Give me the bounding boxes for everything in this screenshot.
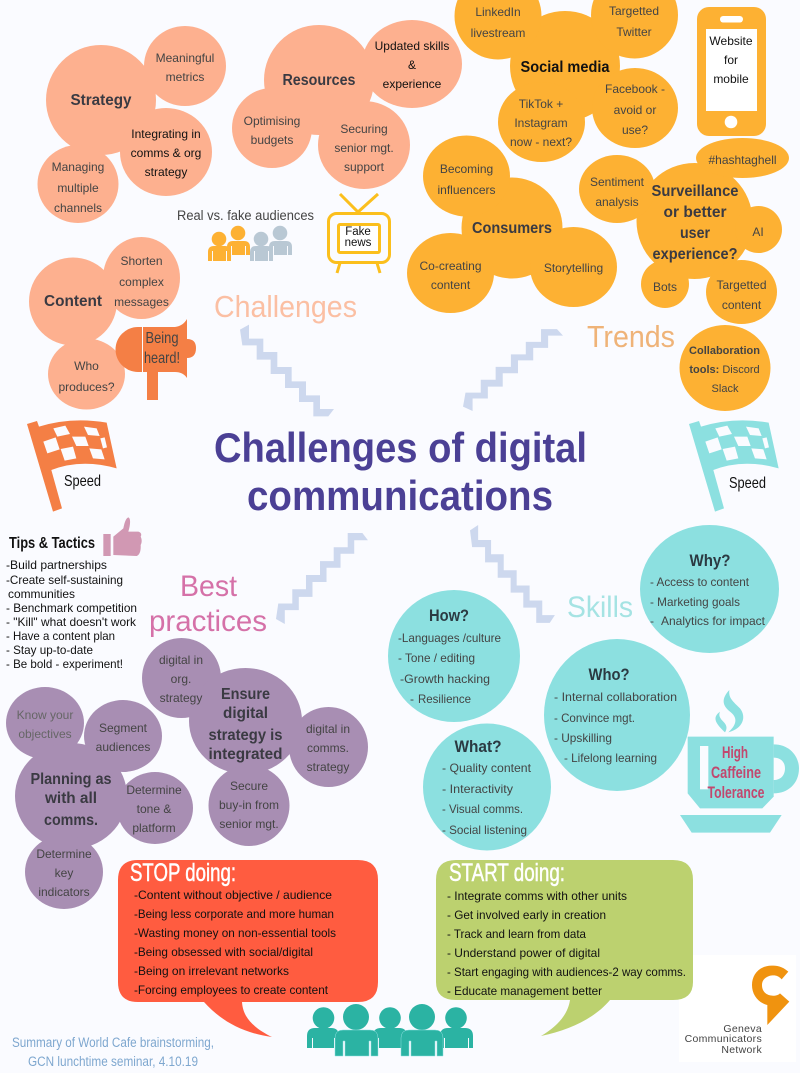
panel: strategy cluster: Strategy bbox=[70, 92, 132, 109]
panel: how: - Tone / editing bbox=[398, 651, 475, 665]
callout: real vs fake audiences: Real vs. fake audiences bbox=[177, 208, 314, 223]
panel: social media cluster bbox=[454, 0, 678, 162]
panel: surveillance cluster: Targetted bbox=[716, 278, 767, 292]
icon: coffee cup high caffeine tolerance: Caffeine bbox=[711, 764, 761, 782]
text block: tips list: - Benchmark competition bbox=[6, 601, 137, 615]
heading: best practices: practices bbox=[149, 605, 267, 638]
icon: thumbs up bbox=[103, 517, 142, 556]
panel: ensure digital strategy cluster: comms. bbox=[307, 741, 349, 755]
icon: orange speed flag: Speed bbox=[64, 473, 101, 490]
panel: planning cluster: indicators bbox=[38, 885, 90, 899]
panel: resources cluster: & bbox=[408, 58, 416, 72]
heading: tips and tactics: Tips & Tactics bbox=[9, 535, 95, 552]
icon: mobile phone website: mobile bbox=[713, 72, 749, 86]
panel: surveillance cluster: #hashtaghell bbox=[708, 153, 777, 167]
panel: ensure digital strategy cluster: org. bbox=[171, 672, 191, 686]
panel: planning cluster: comms. bbox=[44, 812, 98, 829]
panel: stop doing: -Forcing employees to create content bbox=[134, 983, 329, 997]
panel: social media cluster: now - next? bbox=[510, 135, 572, 149]
panel: resources cluster: experience bbox=[383, 77, 442, 91]
heading: best practices bbox=[149, 570, 267, 638]
panel: start doing: - Track and learn from data bbox=[447, 927, 586, 941]
panel: why: - Marketing goals bbox=[650, 595, 740, 609]
panel: why bbox=[640, 525, 779, 653]
panel: what: What? bbox=[454, 738, 502, 756]
panel: start doing: - Get involved early in creation bbox=[447, 908, 606, 922]
text block: tips list: -Create self-sustaining bbox=[6, 573, 123, 587]
panel: surveillance cluster: AI bbox=[752, 225, 764, 239]
panel: consumers cluster: Becoming bbox=[440, 162, 493, 176]
panel: ensure digital strategy cluster: strategy is bbox=[208, 727, 282, 744]
panel: who bbox=[544, 639, 690, 791]
text block: tips list: -Build partnerships bbox=[6, 558, 107, 572]
icon: coffee cup high caffeine tolerance: High bbox=[722, 744, 748, 762]
panel: who: - Internal collaboration bbox=[554, 690, 677, 704]
panel: stop doing: -Being less corporate and more human bbox=[134, 907, 334, 921]
icon: teal speed flag bbox=[689, 420, 779, 512]
panel: strategy cluster: metrics bbox=[166, 70, 204, 84]
arrow: to best practices bbox=[276, 533, 368, 624]
panel: surveillance cluster: user bbox=[680, 225, 710, 242]
panel: planning cluster: objectives bbox=[18, 727, 72, 741]
text block: tips list: communities bbox=[8, 587, 75, 601]
heading: trends: Trends bbox=[587, 319, 675, 354]
panel: how bbox=[388, 590, 520, 722]
panel: resources cluster: Optimising bbox=[244, 114, 300, 128]
text block: tips list: - Stay up-to-date bbox=[6, 643, 93, 657]
text block: footer note bbox=[12, 1035, 214, 1069]
text block: footer note: GCN lunchtime seminar, 4.10.19 bbox=[28, 1054, 198, 1069]
panel: resources cluster: support bbox=[344, 160, 385, 174]
panel: planning cluster: Planning as bbox=[30, 771, 112, 788]
panel: start doing: - Integrate comms with other units bbox=[447, 889, 627, 903]
panel: consumers cluster: influencers bbox=[437, 183, 496, 197]
text block: tips list bbox=[6, 558, 137, 671]
panel: stop doing: -Being on irrelevant networks bbox=[134, 964, 289, 978]
text block: tips list: - Be bold - experiment! bbox=[6, 657, 123, 671]
panel: surveillance cluster: Surveillance bbox=[652, 183, 739, 200]
panel: consumers cluster bbox=[407, 136, 617, 313]
panel: planning cluster: Know your bbox=[17, 708, 73, 722]
panel: planning cluster: Segment bbox=[99, 721, 148, 735]
arrow: to skills bbox=[470, 525, 555, 623]
panel: who: Who? bbox=[588, 666, 630, 684]
panel: strategy cluster: Integrating in bbox=[131, 127, 201, 141]
icon: coffee cup high caffeine tolerance bbox=[680, 690, 799, 833]
icon: fake news tv bbox=[328, 194, 390, 273]
panel: how: How? bbox=[429, 607, 469, 625]
panel: consumers cluster: content bbox=[431, 278, 471, 292]
panel: start doing: - Understand power of digital bbox=[447, 946, 600, 960]
panel: content cluster: messages bbox=[114, 295, 169, 309]
panel: content cluster bbox=[29, 237, 180, 410]
panel: ensure digital strategy cluster: integrated bbox=[208, 746, 282, 763]
panel: strategy cluster: Meaningful bbox=[156, 51, 214, 65]
heading: best practices: Best bbox=[180, 570, 238, 603]
panel: who: - Upskilling bbox=[554, 731, 612, 745]
icon: fake news tv: Fake bbox=[345, 226, 371, 238]
panel: social media cluster: TikTok + bbox=[519, 97, 563, 111]
panel: surveillance cluster: content bbox=[722, 298, 762, 312]
panel: strategy cluster: strategy bbox=[145, 165, 187, 179]
icon: teal speed flag: Speed bbox=[729, 475, 766, 492]
panel: why: Analytics for impact bbox=[661, 614, 766, 628]
panel: ensure digital strategy cluster: digital bbox=[223, 705, 268, 722]
panel: how: - bbox=[410, 692, 414, 706]
panel: surveillance cluster: or better bbox=[664, 204, 726, 221]
panel: ensure digital strategy cluster: senior mgt. bbox=[219, 817, 279, 831]
panel: what bbox=[423, 724, 551, 850]
icon: mobile phone website bbox=[697, 7, 766, 136]
title bbox=[214, 424, 587, 519]
panel: ensure digital strategy cluster: strategy bbox=[307, 760, 349, 774]
panel: who: - Lifelong learning bbox=[564, 751, 657, 765]
panel: resources cluster: Updated skills bbox=[375, 39, 449, 53]
panel: ensure digital strategy cluster bbox=[142, 638, 368, 846]
panel: content cluster: produces? bbox=[58, 380, 115, 394]
panel: social media cluster: Twitter bbox=[616, 25, 652, 39]
panel: content cluster: Shorten bbox=[120, 254, 163, 268]
panel: surveillance cluster: Bots bbox=[653, 280, 677, 294]
panel: what: - Quality content bbox=[442, 761, 532, 775]
panel: ensure digital strategy cluster: buy-in from bbox=[219, 798, 279, 812]
heading: skills: Skills bbox=[567, 591, 633, 624]
panel: why: Why? bbox=[690, 552, 730, 570]
panel: surveillance cluster bbox=[579, 138, 789, 324]
panel: strategy cluster: comms & org bbox=[131, 146, 201, 160]
panel: strategy cluster: channels bbox=[54, 201, 102, 215]
icon: team of people bbox=[307, 1004, 473, 1056]
logo: geneva communicators network: Network bbox=[721, 1044, 762, 1056]
panel: stop doing bbox=[118, 859, 378, 1037]
panel: resources cluster: Resources bbox=[282, 72, 356, 89]
text block: tips list: - Have a content plan bbox=[6, 629, 115, 643]
panel: social media cluster: LinkedIn bbox=[475, 5, 521, 19]
panel: social media cluster: use? bbox=[622, 123, 648, 137]
panel: what: - Interactivity bbox=[442, 782, 513, 796]
panel: planning cluster: with all bbox=[44, 790, 97, 807]
panel: start doing bbox=[436, 859, 693, 1036]
panel: content cluster: Content bbox=[44, 293, 102, 310]
icon: fake news tv: news bbox=[345, 237, 372, 249]
arrow: from challenges bbox=[240, 325, 334, 416]
callout: real vs fake audiences bbox=[177, 208, 314, 261]
panel: how: Resilience bbox=[418, 692, 471, 706]
panel: start doing: - Educate management better bbox=[447, 984, 602, 998]
panel: social media cluster: livestream bbox=[471, 26, 525, 40]
panel: how: -Languages /culture bbox=[398, 631, 501, 645]
panel: collaboration tools: Collaboration bbox=[689, 345, 760, 357]
panel: planning cluster bbox=[6, 687, 193, 909]
arrow: to trends bbox=[463, 329, 563, 411]
panel: social media cluster: Targetted bbox=[609, 4, 659, 18]
heading: challenges: Challenges bbox=[214, 289, 357, 324]
panel: planning cluster: key bbox=[55, 866, 73, 880]
panel: stop doing: -Being obsessed with social/digital bbox=[134, 945, 313, 959]
panel: strategy cluster bbox=[38, 26, 226, 223]
panel: ensure digital strategy cluster: Ensure bbox=[221, 686, 270, 703]
panel: what: - Visual comms. bbox=[442, 802, 523, 816]
panel: ensure digital strategy cluster: digital in bbox=[159, 653, 203, 667]
panel: ensure digital strategy cluster: digital in bbox=[306, 722, 350, 736]
panel: resources cluster bbox=[232, 20, 462, 189]
text block: tips list: - "Kill" what doesn't work bbox=[6, 615, 137, 629]
logo: geneva communicators network bbox=[679, 955, 796, 1062]
icon: orange speed flag bbox=[27, 420, 117, 512]
title: communications bbox=[247, 472, 553, 519]
panel: who: - Convince mgt. bbox=[554, 711, 635, 725]
panel: start doing: START doing: bbox=[449, 859, 565, 887]
icon: megaphone being heard bbox=[116, 319, 196, 400]
panel: collaboration tools: tools: Discord bbox=[689, 364, 760, 376]
panel: stop doing: STOP doing: bbox=[130, 859, 236, 887]
panel: planning cluster: tone & bbox=[137, 802, 171, 816]
panel: collaboration tools bbox=[680, 325, 770, 411]
panel: why: - Access to content bbox=[650, 575, 750, 589]
icon: megaphone being heard: Being bbox=[146, 330, 178, 347]
panel: planning cluster: Determine bbox=[36, 847, 92, 861]
panel: strategy cluster: Managing bbox=[52, 160, 104, 174]
icon: mobile phone website: Website bbox=[709, 34, 753, 48]
panel: surveillance cluster: experience? bbox=[652, 246, 738, 263]
panel: planning cluster: Determine bbox=[126, 783, 182, 797]
panel: why: - bbox=[650, 614, 654, 628]
panel: consumers cluster: Storytelling bbox=[544, 261, 603, 275]
panel: social media cluster: Social media bbox=[520, 59, 610, 76]
panel: social media cluster: avoid or bbox=[614, 103, 656, 117]
panel: content cluster: complex bbox=[119, 275, 164, 289]
panel: what: - Social listening bbox=[442, 823, 527, 837]
panel: consumers cluster: Consumers bbox=[472, 220, 552, 237]
logo: geneva communicators network: Communicators bbox=[685, 1033, 762, 1045]
text block: footer note: Summary of World Cafe brainstorming, bbox=[12, 1035, 214, 1050]
panel: resources cluster: senior mgt. bbox=[334, 141, 394, 155]
panel: social media cluster: Facebook - bbox=[605, 82, 665, 96]
panel: how: -Growth hacking bbox=[400, 672, 490, 686]
panel: surveillance cluster: analysis bbox=[595, 195, 639, 209]
panel: ensure digital strategy cluster: Secure bbox=[230, 779, 268, 793]
panel: surveillance cluster: Sentiment bbox=[590, 175, 645, 189]
panel: strategy cluster: multiple bbox=[57, 181, 99, 195]
panel: content cluster: Who bbox=[74, 359, 99, 373]
panel: collaboration tools: Slack bbox=[712, 383, 739, 395]
icon: mobile phone website: for bbox=[724, 53, 738, 67]
icon: coffee cup high caffeine tolerance: Tolerance bbox=[708, 784, 764, 802]
panel: planning cluster: audiences bbox=[96, 740, 150, 754]
panel: stop doing: -Wasting money on non-essential tools bbox=[134, 926, 336, 940]
panel: social media cluster: Instagram bbox=[514, 116, 568, 130]
panel: stop doing: -Content without objective / audience bbox=[134, 888, 332, 902]
panel: consumers cluster: Co-creating bbox=[419, 259, 482, 273]
panel: ensure digital strategy cluster: strategy bbox=[160, 691, 202, 705]
panel: start doing: - Start engaging with audiences-2 way comms. bbox=[447, 965, 686, 979]
panel: resources cluster: budgets bbox=[251, 133, 293, 147]
title: Challenges of digital bbox=[214, 424, 587, 471]
icon: megaphone being heard: heard! bbox=[144, 350, 180, 367]
panel: resources cluster: Securing bbox=[340, 122, 388, 136]
panel: planning cluster: platform bbox=[132, 821, 176, 835]
logo: geneva communicators network: Geneva bbox=[723, 1023, 762, 1035]
